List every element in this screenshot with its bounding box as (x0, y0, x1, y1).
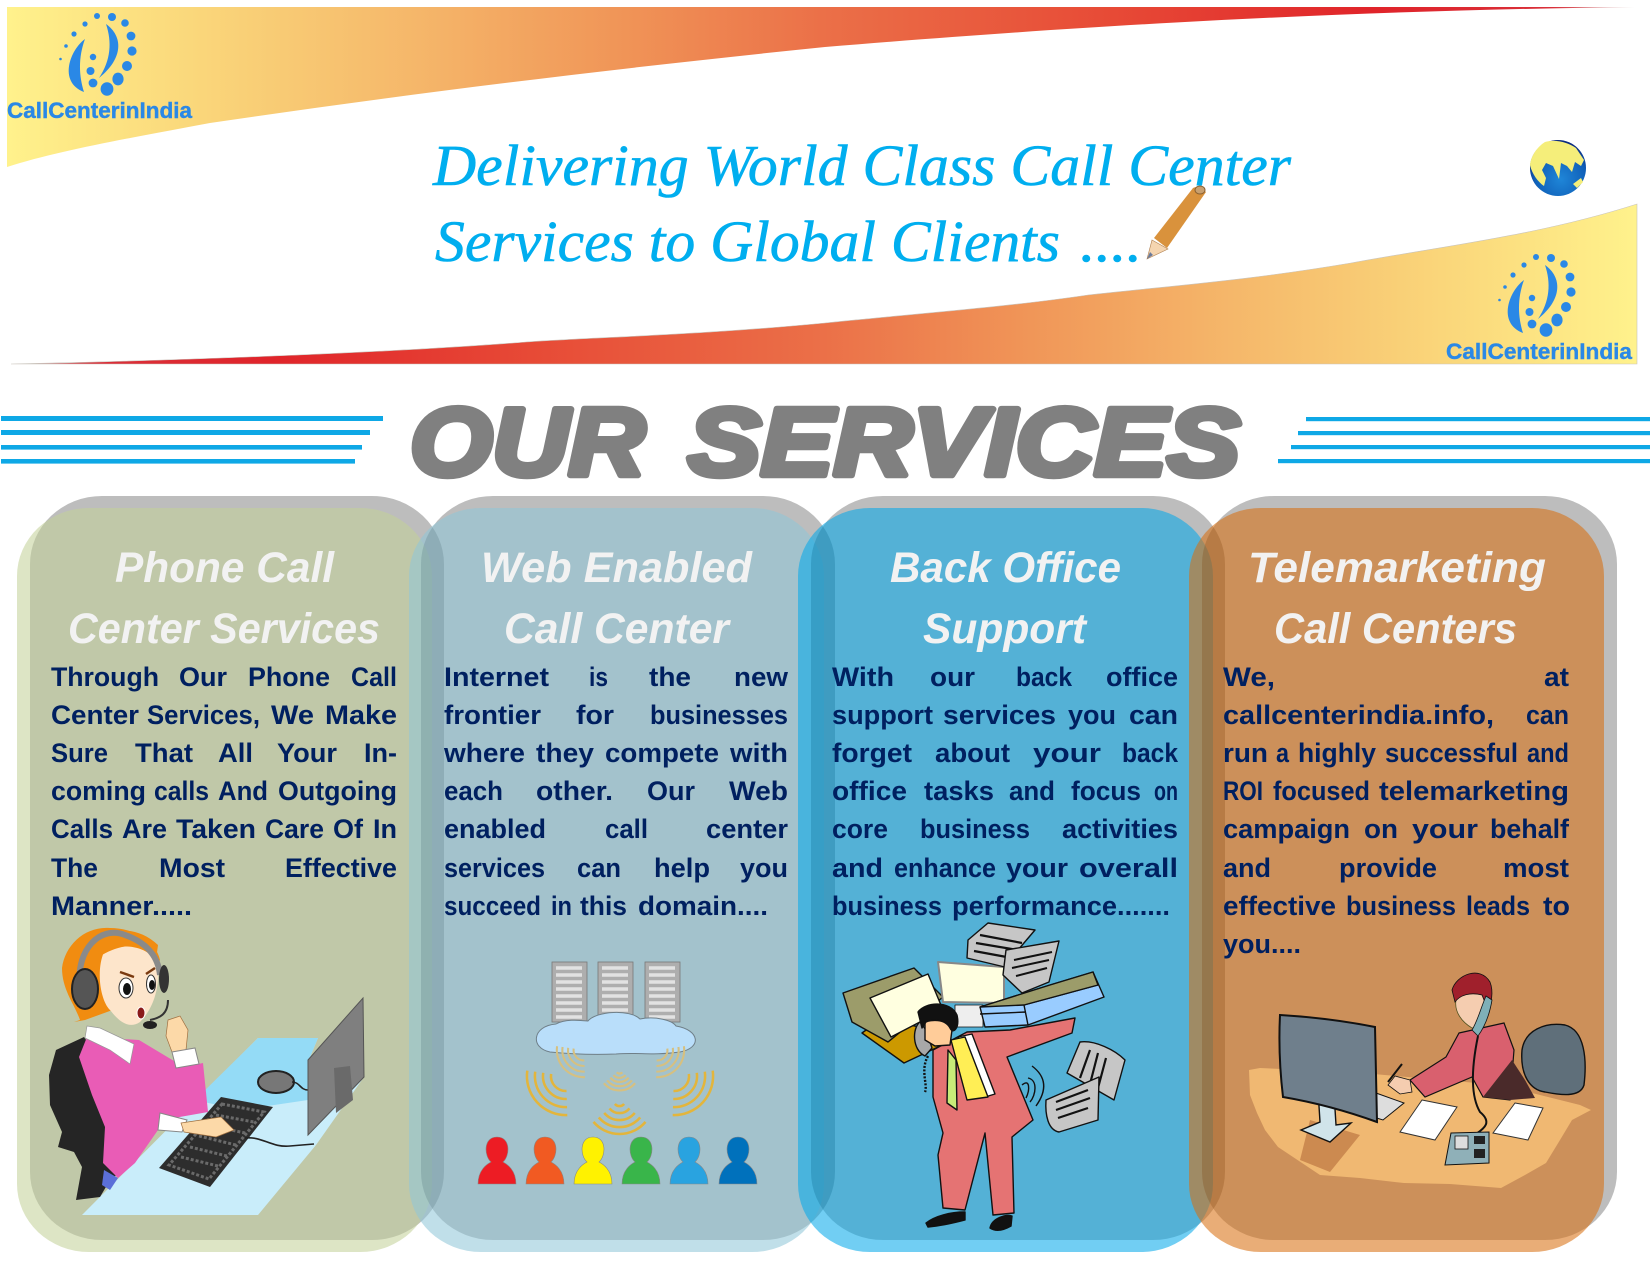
text block: phone call center services: And (218, 776, 268, 806)
text block: phone call center services: Of (333, 814, 363, 844)
text block: telemarketing call centers: callcenterindia.info, (1223, 700, 1494, 730)
text block: telemarketing call centers: and (1223, 853, 1271, 883)
text block: web enabled call center: in (551, 891, 572, 921)
phone and cord (915, 1022, 932, 1056)
heading: our services (410, 389, 1240, 496)
text block: back office support: business (920, 814, 1030, 844)
logo text: CallCenterinIndia (7, 98, 193, 123)
floating papers (1067, 1042, 1125, 1100)
text block: phone call center services: Care (265, 814, 324, 844)
text block: back office support (832, 662, 1178, 921)
users (478, 1137, 757, 1184)
papers (1400, 1100, 1457, 1140)
icon: globe (1530, 140, 1586, 196)
text block: phone call center services: Through (51, 662, 159, 692)
wifi signals (517, 1039, 723, 1134)
text block: web enabled call center: frontier (444, 700, 541, 730)
heading: telemarketing call centers (1248, 544, 1546, 653)
text block: web enabled call center: with (729, 738, 788, 768)
text block: telemarketing call centers: can (1526, 700, 1569, 730)
heading rules: right (1278, 417, 1650, 463)
heading: our services: OUR (410, 389, 645, 496)
heading: phone call center services (68, 544, 380, 653)
eyes and mouth (119, 968, 156, 1019)
yellow box (862, 1020, 938, 1063)
heading rules: left (1, 416, 383, 464)
logo: bottom right (1446, 254, 1633, 364)
text block: back office support: enhance (894, 853, 996, 883)
text block: web enabled call center: new (734, 662, 788, 692)
typing arm and hand (158, 1113, 187, 1132)
text block: telemarketing call centers: telemarketing (1379, 776, 1569, 806)
desk (82, 1038, 364, 1215)
monitor (1279, 1015, 1377, 1122)
text block: web enabled call center: where (443, 738, 525, 768)
title: Delivering World Class Call Center (432, 133, 1291, 198)
text block: phone call center services: Your (277, 738, 337, 768)
telephone handset (1472, 996, 1492, 1036)
text block: phone call center services: Manner..... (51, 891, 192, 921)
text block: back office support: you (1068, 700, 1116, 730)
text block: back office support: performance....... (952, 891, 1170, 921)
server racks (552, 962, 680, 1022)
text block: telemarketing call centers: you.... (1223, 929, 1301, 959)
text block: phone call center services: The (51, 853, 98, 883)
text block: phone call center services: All (218, 738, 253, 768)
panel backgrounds (1189, 496, 1617, 1252)
text block: telemarketing call centers: effective (1223, 891, 1336, 921)
text block: back office support: With (832, 662, 894, 692)
text block: telemarketing call centers: provide (1339, 853, 1437, 883)
chair (1522, 1024, 1585, 1095)
text block: telemarketing call centers: to (1543, 891, 1570, 921)
title: Services to Global Clients (435, 209, 1060, 274)
text block: telemarketing call centers: campaign (1223, 814, 1350, 844)
text block: telemarketing call centers: a (1276, 738, 1289, 768)
logo text: CallCenterinIndia (1446, 339, 1633, 364)
monitor (308, 998, 364, 1135)
text block: web enabled call center: other. (536, 776, 613, 806)
text block: telemarketing call centers: ROI (1223, 776, 1263, 806)
panel backgrounds (409, 496, 835, 1252)
text block: back office support: office (832, 776, 907, 806)
head (925, 1005, 952, 1046)
heading: web enabled call center (481, 544, 753, 653)
blue tray (980, 972, 1104, 1027)
telephone cord (1473, 1036, 1486, 1134)
heading: back office support: Support (923, 605, 1088, 653)
text block: web enabled call center: you (740, 853, 788, 883)
heading: web enabled call center: Web Enabled (481, 544, 753, 592)
text block: web enabled call center: Our (647, 776, 695, 806)
text block: phone call center services: Calls (51, 814, 113, 844)
text block: back office support: your (1033, 738, 1101, 768)
text block: phone call center services (51, 662, 397, 921)
text block: back office support: business (832, 891, 942, 921)
text block: web enabled call center: businesses (650, 700, 788, 730)
text block: web enabled call center: compete (605, 738, 719, 768)
text block: back office support: our (930, 662, 975, 692)
panel: telemarketing call centers (1189, 496, 1617, 1252)
text block: web enabled call center: help (654, 853, 710, 883)
text block: web enabled call center: services (444, 853, 545, 883)
text block: phone call center services: Outgoing (278, 776, 397, 806)
heading: telemarketing call centers: Telemarketing (1248, 544, 1546, 592)
title (432, 133, 1291, 274)
text block: web enabled call center: Web (729, 776, 788, 806)
text block: back office support: services (943, 700, 1056, 730)
text block: back office support: and (832, 853, 883, 883)
title: .... (1080, 209, 1142, 274)
keyboard (159, 1097, 273, 1187)
text block: back office support: forget (832, 738, 912, 768)
text block: telemarketing call centers: your (1412, 814, 1478, 844)
text block: back office support: office (1106, 662, 1178, 692)
text block: web enabled call center: Internet (444, 662, 549, 692)
heading: back office support: Back Office (890, 544, 1121, 592)
head and hair (1456, 989, 1490, 1028)
text block: telemarketing call centers: leads (1466, 891, 1530, 921)
text block: phone call center services: Make (325, 700, 397, 730)
text block: back office support: support (832, 700, 933, 730)
chair (49, 1037, 132, 1200)
icon: pencil (1147, 186, 1206, 259)
text block: back office support: back (1122, 738, 1178, 768)
text block: telemarketing call centers: most (1503, 853, 1569, 883)
text block: phone call center services: Center (51, 700, 139, 730)
text block: web enabled call center: for (576, 700, 614, 730)
jacket (1410, 1023, 1514, 1100)
second monitor (938, 962, 1004, 1003)
text block: phone call center services: Call (351, 662, 397, 692)
heading: our services: SERVICES (688, 389, 1240, 496)
text block: back office support: about (935, 738, 1010, 768)
text block: telemarketing call centers: run (1223, 738, 1268, 768)
text block: web enabled call center: this (580, 891, 627, 921)
heading: phone call center services: Phone Call (115, 544, 335, 592)
text block: phone call center services: Taken (176, 814, 256, 844)
text block: phone call center services: In (373, 814, 397, 844)
banner: top swoosh (7, 7, 1635, 167)
cloud (536, 1012, 695, 1054)
text block: telemarketing call centers: at (1544, 662, 1569, 692)
shoes (926, 1212, 965, 1227)
text block: web enabled call center: they (536, 738, 594, 768)
text block: web enabled call center: succeed (444, 891, 541, 921)
panel backgrounds (798, 496, 1225, 1252)
text block: telemarketing call centers: business (1346, 891, 1456, 921)
text block: phone call center services: Are (122, 814, 167, 844)
headset (72, 933, 169, 1029)
monitor stand (1301, 1090, 1351, 1142)
heading: phone call center services: Center Services (68, 605, 380, 653)
text block: telemarketing call centers: focused (1273, 776, 1370, 806)
face (100, 946, 158, 1025)
shirt (951, 1037, 988, 1100)
text block: phone call center services: That (135, 738, 193, 768)
banner: bottom swoosh (11, 204, 1637, 364)
text block: telemarketing call centers: and (1527, 738, 1569, 768)
panel: web enabled call center (409, 496, 835, 1252)
desk (1249, 1068, 1591, 1188)
torso (79, 1037, 208, 1178)
illustration: servers, cloud and users (478, 962, 757, 1184)
text block: telemarketing call centers: on (1364, 814, 1398, 844)
raised hand (166, 1016, 188, 1052)
text block: back office support: can (1129, 700, 1178, 730)
panel backgrounds (17, 496, 444, 1252)
panel: phone call center services (17, 496, 444, 1252)
text block: back office support: your (1006, 853, 1068, 883)
text block: back office support: focus (1071, 776, 1141, 806)
text block: back office support: and (1009, 776, 1055, 806)
text block: phone call center services: In- (364, 738, 397, 768)
text block: back office support: back (1016, 662, 1072, 692)
text block: web enabled call center: can (577, 853, 621, 883)
text block: web enabled call center: the (649, 662, 691, 692)
text block: phone call center services: Services, (147, 700, 260, 730)
text block: back office support: overall (1079, 853, 1178, 883)
illustration: woman on telephone at computer desk (1249, 973, 1591, 1188)
jacket (933, 1018, 1075, 1215)
text block: web enabled call center: enabled (444, 814, 546, 844)
text block: web enabled call center: domain.... (638, 891, 768, 921)
text block: telemarketing call centers: We, (1223, 662, 1275, 692)
speaker (258, 1071, 294, 1093)
text block: web enabled call center: each (444, 776, 503, 806)
text block: back office support: activities (1062, 814, 1178, 844)
vibration marks (1022, 1066, 1044, 1106)
text block: phone call center services: Sure (51, 738, 108, 768)
text block: back office support: on (1154, 776, 1178, 806)
tie (947, 1050, 957, 1110)
text block: phone call center services: calls (154, 776, 209, 806)
text block: web enabled call center: center (706, 814, 788, 844)
illustration: stressed man with office equipment (843, 923, 1125, 1230)
text block: telemarketing call centers: highly (1298, 738, 1376, 768)
heading: web enabled call center: Call Center (504, 605, 731, 653)
heading: back office support (890, 544, 1121, 653)
text block: phone call center services: Our (179, 662, 227, 692)
shirt collar (958, 1034, 995, 1097)
text block: back office support: tasks (924, 776, 994, 806)
text block: web enabled call center: call (605, 814, 648, 844)
text block: back office support: core (832, 814, 888, 844)
logo mark (59, 13, 137, 96)
heading: telemarketing call centers: Call Centers (1274, 605, 1517, 653)
illustration: woman on headset at desk (49, 928, 364, 1215)
text block: phone call center services: We (271, 700, 314, 730)
text block: phone call center services: Phone (248, 662, 330, 692)
text block: web enabled call center (443, 662, 788, 921)
text block: telemarketing call centers (1223, 662, 1570, 959)
desk phone (1445, 1132, 1489, 1165)
panel: back office support (798, 496, 1225, 1252)
text block: telemarketing call centers: behalf (1490, 814, 1569, 844)
papers on top (967, 923, 1035, 968)
text block: phone call center services: Effective (285, 853, 397, 883)
keyboard (1370, 1093, 1404, 1120)
text block: phone call center services: coming (51, 776, 146, 806)
text block: phone call center services: Most (159, 853, 225, 883)
text block: web enabled call center: is (589, 662, 608, 692)
logo: top left (7, 13, 193, 123)
logo mark (1498, 254, 1576, 337)
collar (85, 1026, 134, 1064)
writing hand and pen (1388, 1076, 1412, 1094)
text block: telemarketing call centers: successful (1385, 738, 1518, 768)
left monitor (843, 968, 943, 1042)
hair back (62, 928, 160, 1022)
